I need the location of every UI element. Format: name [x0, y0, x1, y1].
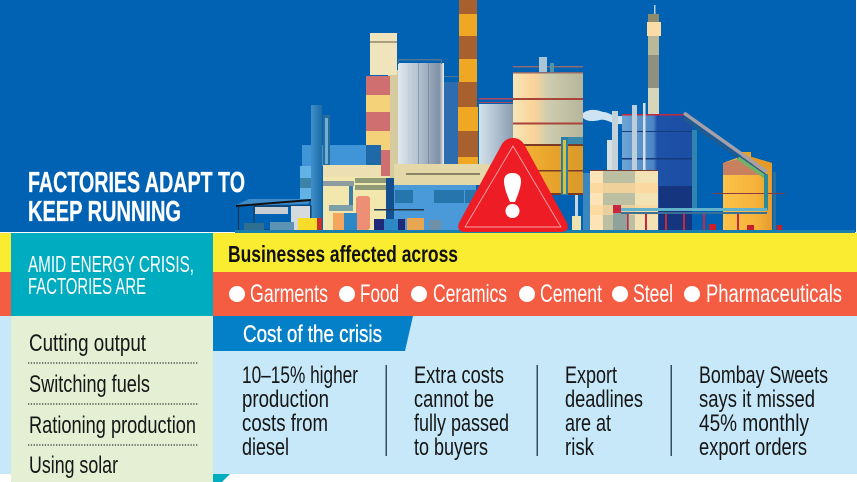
cost point: bombay sweets: says it missed	[699, 386, 815, 413]
cost point: export deadlines	[565, 362, 643, 461]
accent: teal corner	[213, 474, 230, 482]
blue pillar and ladder	[311, 105, 330, 218]
cream factory building	[323, 150, 394, 230]
cost point: extra costs: fully passed	[414, 410, 509, 437]
slim right chimney	[647, 5, 661, 114]
ground strip	[235, 230, 855, 233]
cost point: bombay sweets	[699, 362, 828, 461]
icon: warning triangle	[458, 138, 568, 232]
cost point: extra costs: cannot be	[414, 386, 494, 413]
left edge colour strip	[0, 233, 11, 316]
panel: affected sectors	[213, 272, 857, 316]
large cream and yellow tank	[513, 57, 583, 195]
yellow box	[298, 218, 322, 230]
cost point: higher production costs: diesel	[242, 434, 289, 461]
sector: cement	[519, 280, 602, 308]
blue cylinder tower	[622, 103, 697, 230]
cost point: extra costs: Extra costs	[414, 362, 504, 389]
cost point: higher production costs: 10–15% higher	[242, 362, 358, 389]
cost point: export deadlines: Export	[565, 362, 617, 389]
cost point: export deadlines: risk	[565, 434, 595, 461]
panel: businesses affected heading	[213, 233, 857, 272]
factory illustration	[235, 0, 855, 233]
cost point: higher production costs: production	[242, 386, 329, 413]
sector: garments: Garments	[250, 280, 328, 308]
cost point: export deadlines: deadlines	[565, 386, 643, 413]
panel: amid energy crisis heading	[11, 233, 213, 316]
smoke plume and pipes	[583, 110, 622, 171]
tab: cost of the crisis	[213, 316, 413, 351]
blue block behind left building	[300, 145, 381, 200]
yellow silo	[713, 152, 785, 230]
panel: amid energy crisis heading: FACTORIES ARE	[28, 273, 146, 299]
open shed	[236, 199, 311, 230]
tall striped chimney	[457, 0, 478, 165]
heading: businesses affected across: Businesses affected across	[228, 241, 458, 267]
sector: steel	[612, 280, 673, 308]
sector: food: Food	[360, 280, 399, 308]
conveyor	[684, 113, 768, 210]
sector: garments	[229, 280, 328, 308]
panel: amid energy crisis heading: AMID ENERGY CRISIS,	[28, 251, 194, 277]
list item: switching fuels: Switching fuels	[29, 371, 150, 398]
title	[28, 167, 245, 228]
dark blue tank	[444, 76, 458, 165]
list item: rationing production: Rationing production	[29, 412, 196, 439]
grey tank	[479, 98, 514, 165]
panel: cost of the crisis	[0, 316, 857, 482]
beige and pink chimney	[366, 33, 400, 178]
list item: cutting output: Cutting output	[29, 330, 146, 357]
sector: food	[339, 280, 399, 308]
tab: cost of the crisis: Cost of the crisis	[243, 321, 382, 348]
title: KEEP RUNNING	[28, 196, 181, 228]
sector: steel: Steel	[633, 280, 673, 308]
cost point: higher production costs: costs from	[242, 410, 328, 437]
background: blue header	[0, 0, 856, 232]
sector: ceramics: Ceramics	[433, 280, 507, 308]
panel: factory responses list	[11, 316, 213, 482]
list item: using solar: Using solar	[29, 452, 118, 479]
checked cream building	[590, 170, 658, 230]
cost point: higher production costs	[242, 362, 358, 461]
sector: ceramics	[411, 280, 507, 308]
cost point: bombay sweets: 45% monthly	[699, 410, 810, 437]
title: FACTORIES ADAPT TO	[28, 167, 245, 199]
cost point: extra costs	[414, 362, 509, 461]
cost point: bombay sweets: export orders	[699, 434, 807, 461]
cost point: export deadlines: are at	[565, 410, 611, 437]
silver storage tank	[398, 59, 444, 165]
cost point: extra costs: to buyers	[414, 434, 488, 461]
platform and supports	[572, 173, 782, 232]
sector: cement: Cement	[540, 280, 602, 308]
low blue factory hall	[374, 164, 490, 230]
